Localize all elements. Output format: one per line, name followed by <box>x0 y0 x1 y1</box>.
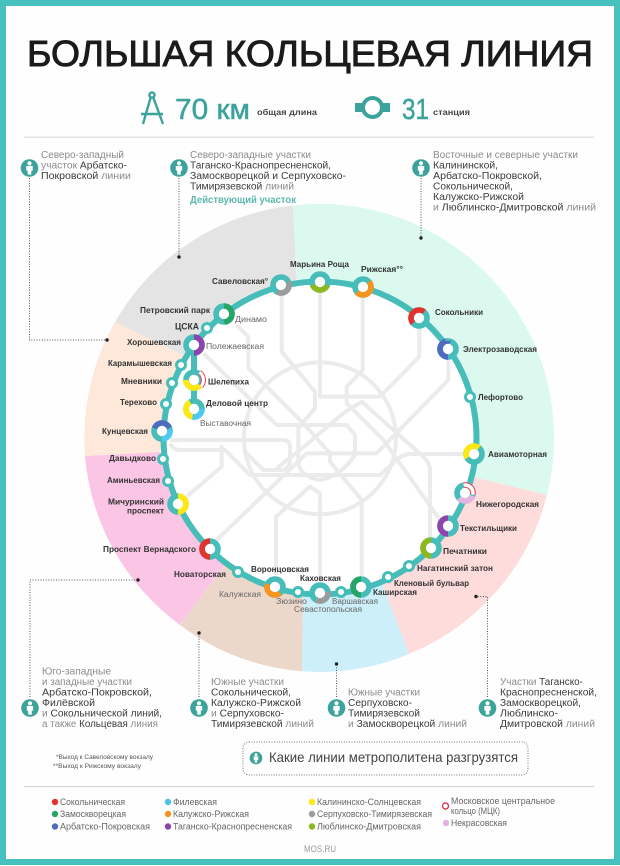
station labels: Мичуринский <box>108 498 164 506</box>
note text: Серпуховско- <box>348 698 412 709</box>
note text <box>42 666 162 730</box>
note text: Южные участки <box>211 677 284 688</box>
main ring line <box>164 282 476 594</box>
station: Prospekt Vernadskogo <box>202 541 218 557</box>
note text <box>500 677 597 730</box>
note text: Южные участки <box>348 688 420 698</box>
station labels <box>102 260 547 614</box>
legend: Таганско-Краснопресненская <box>173 822 292 832</box>
note text: Сокольнической, <box>211 688 291 698</box>
note text: участок Арбатско- <box>41 160 127 172</box>
note text: а также Кольцевая линия <box>42 719 158 730</box>
station labels: Карамышевская <box>108 359 172 368</box>
station labels: проспект <box>127 506 164 516</box>
note text: Сокольнической, <box>433 182 513 192</box>
callout text: Какие линии метрополитена разгрузятся <box>269 749 518 765</box>
stat value: 31: 31 <box>402 94 429 126</box>
station labels: Каширская <box>373 588 417 597</box>
station labels: Зюзино <box>276 597 308 606</box>
station labels: Калужская <box>219 590 261 599</box>
note text: и западные участки <box>42 677 132 688</box>
note text: Восточные и северные участки <box>433 150 578 161</box>
station labels: Хорошевская <box>127 338 181 347</box>
legend: Калужско-Рижская <box>173 809 249 819</box>
station labels: Кунцевская <box>102 427 148 436</box>
footnotes <box>53 755 153 770</box>
note text: Калининской, <box>433 160 498 172</box>
station labels: Сокольники <box>435 308 483 317</box>
note text: Покровской линии <box>41 171 131 182</box>
note text: Калужско-Рижской <box>433 192 524 203</box>
station: Dinamo <box>216 306 232 322</box>
station labels: Рижская°° <box>361 265 403 274</box>
stat: length <box>141 92 317 126</box>
panel: top-left note <box>21 150 131 342</box>
icon: person <box>21 159 38 177</box>
station labels: Шелепиха <box>208 378 250 386</box>
legend: Арбатско-Покровская <box>60 822 150 832</box>
legend: Сокольническая <box>60 797 125 807</box>
legend: кольцо (МЦК) <box>451 806 500 816</box>
chart: ring map <box>84 204 554 672</box>
station: Pechatniki <box>423 540 439 556</box>
station labels: Текстильщики <box>460 524 517 533</box>
station labels: Лефортово <box>478 393 523 402</box>
station: Delovoy tsentr <box>185 400 203 418</box>
small stations <box>158 324 474 596</box>
sector: east mint <box>293 204 554 495</box>
icon: person <box>190 699 208 717</box>
station labels: Варшавская <box>332 597 378 606</box>
station: Michurinsky prospekt <box>170 496 186 512</box>
legend: Филевская <box>173 797 217 807</box>
note text <box>211 677 314 730</box>
note text: Арбатско-Покровской, <box>433 170 542 182</box>
note text: Замоскворецкой, <box>500 698 581 709</box>
note text: и Замоскворецкой линий <box>348 719 467 730</box>
note text: Тимирязевской линий <box>190 182 294 192</box>
title: БОЛЬШАЯ КОЛЬЦЕВАЯ ЛИНИЯ <box>27 33 593 74</box>
sector: west peach <box>84 322 183 456</box>
station: Aviamotornaya <box>463 443 485 465</box>
icon: compass <box>141 92 163 124</box>
stat value: 70 km: 70 км <box>175 94 250 126</box>
panel: top-right note <box>412 150 596 240</box>
station labels: ЦСКА <box>175 322 199 332</box>
station labels: Севастопольская <box>294 605 362 614</box>
station: Kashirskaya <box>353 579 369 595</box>
sector: south beige <box>180 565 303 671</box>
active section caption: Действующий участок <box>190 195 297 206</box>
station labels: Савеловская° <box>212 277 268 286</box>
stat: stations <box>355 94 470 126</box>
station: Kakhovskaya <box>311 584 329 602</box>
stat caption: stations: станция <box>433 107 470 117</box>
source: MOS.RU <box>304 844 336 854</box>
note text: Дмитровской линий <box>500 719 595 730</box>
station labels: Полежаевская <box>206 342 264 351</box>
station labels: Терехово <box>120 398 157 407</box>
legend <box>52 796 555 832</box>
legend: Серпуховско-Тимирязевская <box>317 809 432 819</box>
station labels: Электрозаводская <box>463 345 537 354</box>
station: Nizhegorodskaya <box>455 483 475 503</box>
stat caption: total length: общая длина <box>257 107 317 117</box>
station labels: Нижегородская <box>476 500 539 509</box>
icon: person <box>250 752 262 764</box>
note text: Юго-западные <box>42 666 111 678</box>
note text: Участки Таганско- <box>500 677 583 688</box>
note text: Калужско-Рижской <box>211 698 301 709</box>
note text: и Серпуховско- <box>211 708 284 720</box>
station labels: Воронцовская <box>251 565 309 574</box>
icon: person <box>479 699 496 717</box>
background metro map <box>170 290 467 580</box>
icon: person <box>21 699 39 717</box>
icon: person <box>412 159 430 177</box>
station: Sokolniki <box>408 307 430 329</box>
icon: person <box>170 159 188 177</box>
note text: Краснопресненской, <box>500 688 597 698</box>
note text: Люблинско- <box>500 708 558 720</box>
note text: Таганско-Краснопресненской, <box>190 160 331 172</box>
station: Rizhskaya <box>352 276 374 298</box>
station labels: Выставочная <box>200 419 251 428</box>
footnotes: **Выход к Рижскому вокзалу <box>53 764 141 770</box>
panel: south-east note <box>474 595 597 730</box>
legend: Московское центральное <box>451 796 555 806</box>
panel: top-middle note <box>170 150 346 259</box>
station labels: Нагатинский затон <box>417 564 493 573</box>
legend: Замоскворецкая <box>60 809 126 819</box>
station labels: Давыдково <box>109 454 156 463</box>
branch line <box>191 345 197 409</box>
note text: Северо-западный <box>41 150 124 161</box>
note text: Замоскворецкой и Серпуховско- <box>190 171 346 182</box>
note text <box>41 150 131 182</box>
note text: и Сокольнической линий, <box>42 708 162 720</box>
station labels: Каховская <box>300 574 341 583</box>
sector: south-east rose <box>382 477 547 654</box>
note text <box>433 150 596 214</box>
callout <box>243 742 528 775</box>
note text <box>190 150 346 192</box>
station labels: Проспект Вернадского <box>103 545 196 554</box>
station: Kaluzhskaya <box>264 576 286 598</box>
station: Savelovskaya <box>270 274 292 296</box>
footnotes: *Выход к Савеловскому вокзалу <box>56 755 153 761</box>
station: Khoroshevskaya <box>186 337 202 353</box>
station: Tekstilshchiki <box>440 518 456 534</box>
sector: north-west gray <box>115 206 297 355</box>
icon: person <box>328 699 345 717</box>
icon: station <box>355 98 390 117</box>
panel: south note 2 <box>328 662 467 730</box>
station: Shelepikha <box>181 367 207 393</box>
note text: Тимирязевской <box>348 708 420 720</box>
note text: Северо-западные участки <box>190 150 311 161</box>
note text: Тимирязевской линий <box>211 719 314 730</box>
station: Elektrozavodskaya <box>440 341 456 357</box>
sector: south-west pink <box>85 452 225 625</box>
note text: и Люблинско-Дмитровской линий <box>433 202 596 214</box>
station labels: Новаторская <box>174 570 226 579</box>
legend: Некрасовская <box>451 818 507 828</box>
station labels: Авиамоторная <box>488 450 547 459</box>
panel: south-west note <box>21 578 162 730</box>
station: Kuntsevskaya <box>152 421 172 441</box>
note text <box>348 688 467 730</box>
legend: Люблинско-Дмитровская <box>317 822 421 832</box>
station labels: Динамо <box>235 315 268 324</box>
station labels: Аминьевская <box>107 476 160 485</box>
station labels: Марьина Роща <box>290 260 350 269</box>
note text: Филёвской <box>42 698 95 709</box>
station labels: Кленовый бульвар <box>394 579 469 588</box>
panel: south note 1 <box>190 631 314 730</box>
station labels: Мневники <box>121 377 162 386</box>
station labels: Петровский парк <box>140 306 211 315</box>
sector: south blue <box>302 583 409 672</box>
station labels: Деловой центр <box>206 399 268 408</box>
station labels: Печатники <box>443 547 487 556</box>
station: Marina Roshcha <box>309 271 331 293</box>
legend: Калининско-Солнцевская <box>317 797 421 807</box>
note text: Арбатско-Покровской, <box>42 686 152 698</box>
